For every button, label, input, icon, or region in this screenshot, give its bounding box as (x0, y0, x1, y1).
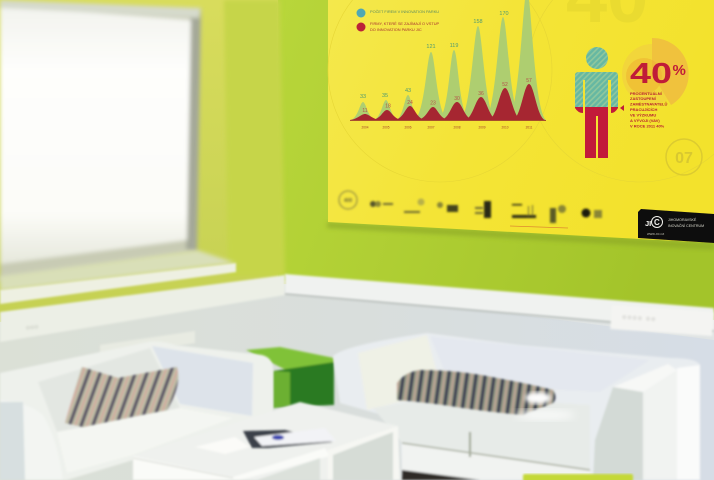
legend: red dot: FIRMY, KTERÉ SE ZAJÍMAJÍ O VSTUP (370, 21, 440, 26)
page number 07: 07 (675, 150, 693, 167)
right pillow (397, 370, 556, 415)
callout: description: ZASTOUPENÍ (630, 96, 657, 101)
chart values: total firms: 158 (473, 19, 483, 25)
chart values: interested firms: 57 (526, 78, 532, 84)
chart years: 2010 (501, 126, 509, 130)
right sofa (333, 333, 700, 480)
power sockets left: ○○○ (25, 324, 39, 332)
lower wall (0, 284, 714, 480)
rail: left (0, 275, 285, 342)
chart values: interested firms: 36 (478, 91, 484, 97)
legend: red dot (356, 21, 440, 32)
chart years: 2006 (404, 126, 412, 130)
wall corner shadow (224, 0, 285, 276)
JIC logo box: INOVAČNÍ CENTRUM (668, 223, 704, 228)
chart years: 2004 (361, 126, 369, 130)
callout: description: VE VÝZKUMU (630, 112, 656, 118)
sill shadow band (0, 250, 236, 291)
power sockets right: ○○○○ ○○ (622, 314, 657, 323)
callout: description: ZAMĚSTNAVATELŮ (630, 102, 667, 106)
callout: description: V ROCE 2011 40% (630, 124, 665, 128)
poster shadow (327, 222, 714, 250)
yellow-green foreground object (523, 474, 633, 480)
chart values: total firms: 170 (499, 11, 509, 17)
chart values: total firms: 33 (360, 94, 366, 100)
window sill (0, 263, 236, 304)
thumbnail strip of infographics (339, 191, 602, 223)
icon: person figure (575, 47, 618, 158)
chart values: interested firms: 23 (430, 100, 436, 106)
chart values: interested firms (362, 78, 532, 114)
area chart: green peaks (350, 0, 546, 120)
legend: blue dot: POČET FIREM V INNOVATION PARKU (370, 9, 439, 14)
window (0, 0, 201, 282)
thumbnail strip of infographics: 400 (344, 198, 352, 204)
green side table (246, 347, 334, 408)
highlight on right sofa (525, 392, 551, 404)
left pillow (65, 367, 178, 427)
chart values: interested firms: 11 (362, 108, 368, 114)
chart years: 2009 (478, 126, 486, 130)
icon: radial percent wedge (622, 38, 689, 105)
legend: blue dot (356, 8, 439, 18)
chart values: total firms: 121 (426, 44, 436, 50)
area chart: red peaks (350, 84, 545, 120)
callout: 40 percent (630, 58, 686, 90)
poster (328, 0, 714, 243)
legend: red dot: DO INNOVATION PARKU JIC (370, 27, 422, 32)
chart years: 2008 (453, 126, 461, 130)
JIC logo box: JI (645, 219, 651, 228)
chart values: total firms: 119 (450, 43, 458, 49)
callout: description: PRACUJÍCÍCH (630, 107, 657, 112)
chart values: total firms: 43 (405, 88, 411, 94)
left sofa (0, 341, 273, 480)
white coffee table (133, 402, 400, 480)
chart values: total firms (360, 11, 509, 100)
background circles (328, 0, 552, 182)
callout: description: PROCENTUÁLNÍ (630, 91, 663, 96)
JIC logo box (638, 209, 714, 243)
chart values: interested firms: 24 (407, 100, 413, 106)
callout: 40 percent: 40 (630, 58, 672, 90)
chart values: interested firms: 18 (385, 104, 391, 110)
icon: pointer arrow (620, 105, 624, 111)
chart years: 2007 (427, 126, 435, 130)
papers on table (195, 428, 336, 454)
callout: description (630, 91, 667, 128)
chart years: 2005 (382, 126, 390, 130)
radiator strip (100, 331, 195, 358)
power sockets right (610, 305, 714, 336)
chart years (361, 126, 533, 130)
chart years: 2011 (526, 126, 533, 130)
callout: 40 percent: % (672, 62, 686, 79)
page number 07 (666, 139, 702, 175)
JIC logo box: C (654, 218, 660, 227)
callout: description: A VÝVOJI (VAV) (630, 118, 660, 123)
chart values: interested firms: 52 (502, 82, 508, 88)
JIC logo box: WWW.JIC.CZ (647, 232, 665, 236)
rail: right (285, 274, 714, 330)
wall: left of poster (0, 0, 300, 330)
small red line along the bottom edge (510, 226, 568, 228)
chart values: total firms: 35 (382, 93, 388, 99)
JIC logo box: JIHOMORAVSKÉ (668, 217, 697, 222)
chart values: interested firms: 30 (454, 96, 460, 102)
chart baseline (350, 120, 546, 122)
wall: corner and right side (278, 0, 714, 320)
